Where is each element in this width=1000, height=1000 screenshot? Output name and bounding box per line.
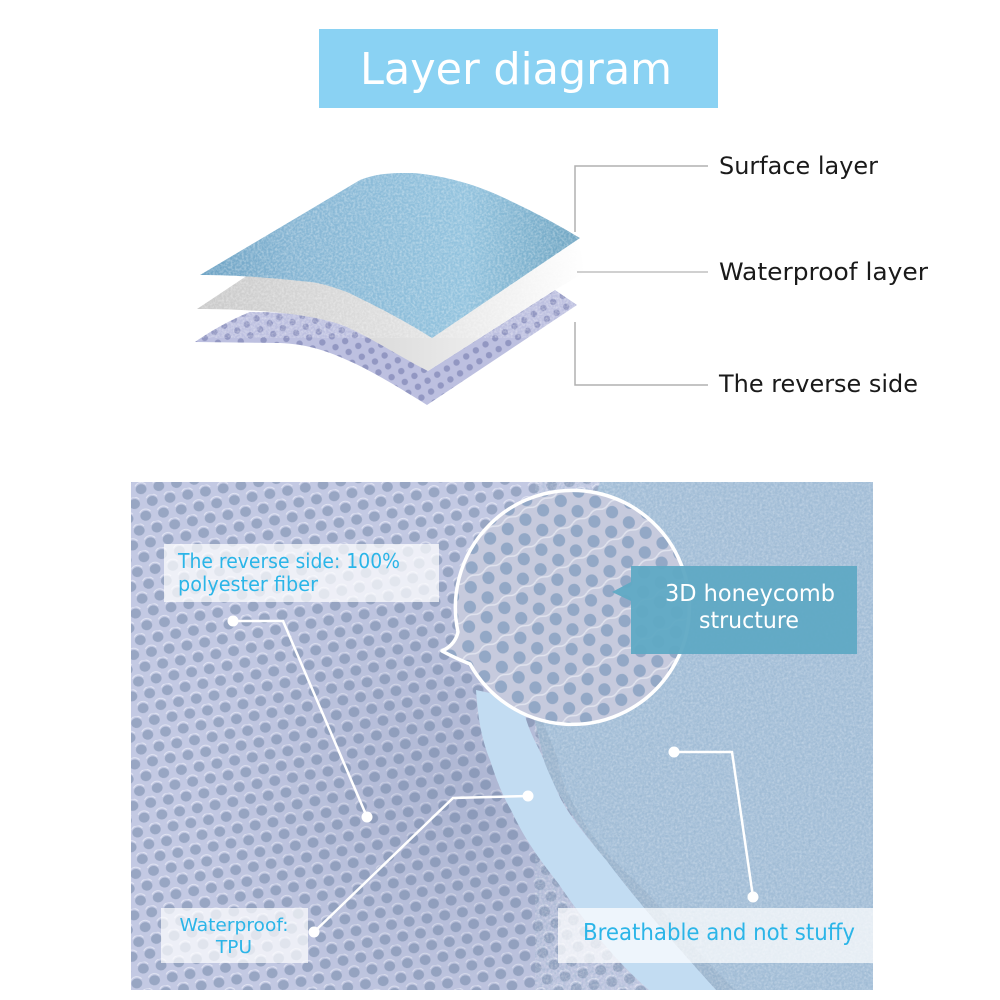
- layer: waterproof film: [197, 240, 585, 371]
- label: waterproof layer: Waterproof layer: [719, 258, 928, 286]
- label box: waterproof TPU: [161, 908, 308, 963]
- layer diagram: stacked fabric layers: [195, 173, 585, 405]
- callout: 3D honeycomb structure: [612, 566, 857, 654]
- title banner: [319, 29, 718, 108]
- connector: reverse side: [575, 322, 708, 385]
- binding edge band: [476, 690, 716, 990]
- magnifier bubble: 3D honeycomb: [440, 485, 689, 724]
- label: the reverse side: The reverse side: [718, 370, 918, 398]
- connector: waterproof layer: [577, 271, 708, 273]
- callout: 3D honeycomb structure: structure: [699, 608, 799, 634]
- label box: waterproof TPU: Waterproof:: [180, 915, 288, 936]
- label box: reverse side material: polyester fiber: [178, 572, 319, 596]
- layer: surface terry cloth: [200, 173, 580, 338]
- label box: reverse side material: [164, 544, 439, 602]
- label box: reverse side material: The reverse side: 100%: [177, 549, 400, 573]
- seam between binding and cloth: [534, 720, 735, 990]
- label box: waterproof TPU: TPU: [215, 937, 252, 958]
- callout: 3D honeycomb structure: 3D honeycomb: [665, 581, 835, 607]
- panel: fabric close-up photo: [131, 482, 873, 990]
- mesh shading: [270, 606, 591, 990]
- leader line: breathable: [668, 746, 758, 902]
- label box: breathable: [558, 908, 873, 963]
- connector: surface layer: [575, 166, 708, 232]
- title banner: Layer diagram: [360, 44, 672, 95]
- leader line: reverse side: [228, 616, 372, 822]
- surface cloth texture: [535, 482, 873, 990]
- leader line: waterproof: [308, 790, 534, 938]
- layer: reverse side mesh: [195, 290, 577, 405]
- label: surface layer: Surface layer: [719, 152, 878, 180]
- label box: breathable: Breathable and not stuffy: [583, 920, 855, 946]
- mesh fabric background: [131, 482, 716, 990]
